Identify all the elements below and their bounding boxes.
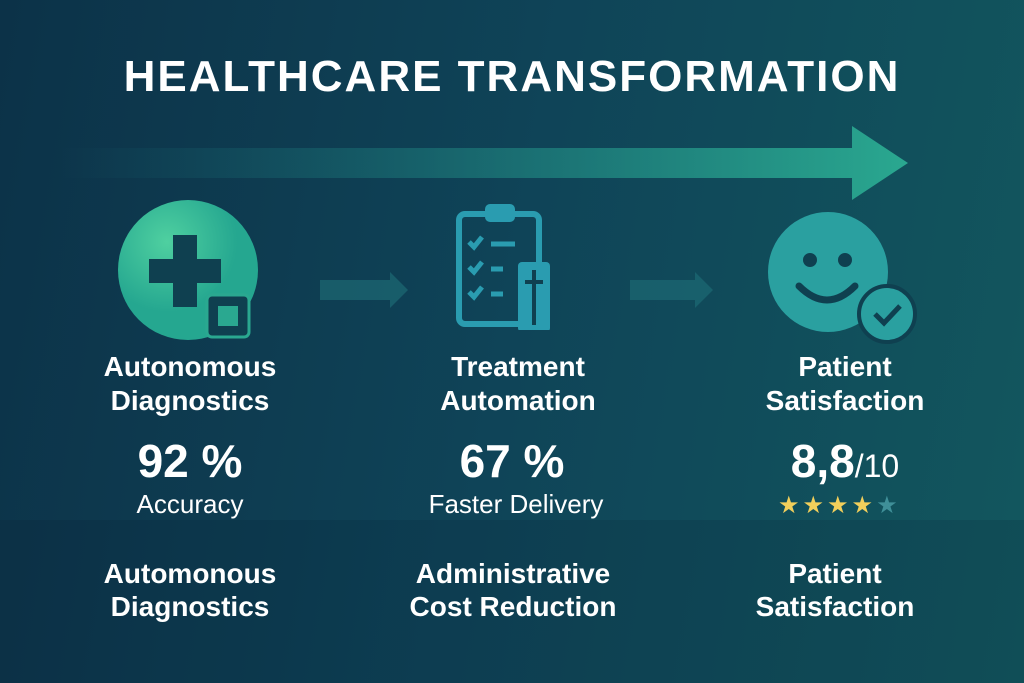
- icon: clipboard: [456, 204, 550, 330]
- stat 1: 92 %: [138, 435, 242, 487]
- column 2 text: Automation: [440, 385, 596, 416]
- icon: smiley with check: [768, 212, 917, 344]
- text: Faster Delivery: [429, 489, 603, 519]
- text: Administrative: [416, 558, 610, 589]
- column 1 text: [104, 351, 276, 416]
- column 1 text: Diagnostics: [111, 385, 269, 416]
- title: HEALTHCARE TRANSFORMATION: [124, 52, 900, 101]
- column 2 text: Treatment: [451, 351, 585, 382]
- stat 2: 67 %: [460, 435, 564, 487]
- column 2 text: [440, 351, 596, 416]
- column 3 text: [766, 351, 924, 416]
- column 3 text: Patient: [798, 351, 892, 382]
- text: Patient: [788, 558, 882, 589]
- stars rating: ★★★★★: [778, 492, 901, 519]
- icon: medical cross with chip: [118, 200, 258, 340]
- text: Satisfaction: [756, 591, 914, 622]
- text: Accuracy: [137, 489, 243, 519]
- column 1 text: Autonomous: [104, 351, 276, 382]
- text: Diagnostics: [111, 591, 269, 622]
- text: Cost Reduction: [410, 591, 616, 622]
- stat 3: 8,8/10: [791, 435, 899, 487]
- column 3 text: Satisfaction: [766, 385, 924, 416]
- text: Automonous: [104, 558, 276, 589]
